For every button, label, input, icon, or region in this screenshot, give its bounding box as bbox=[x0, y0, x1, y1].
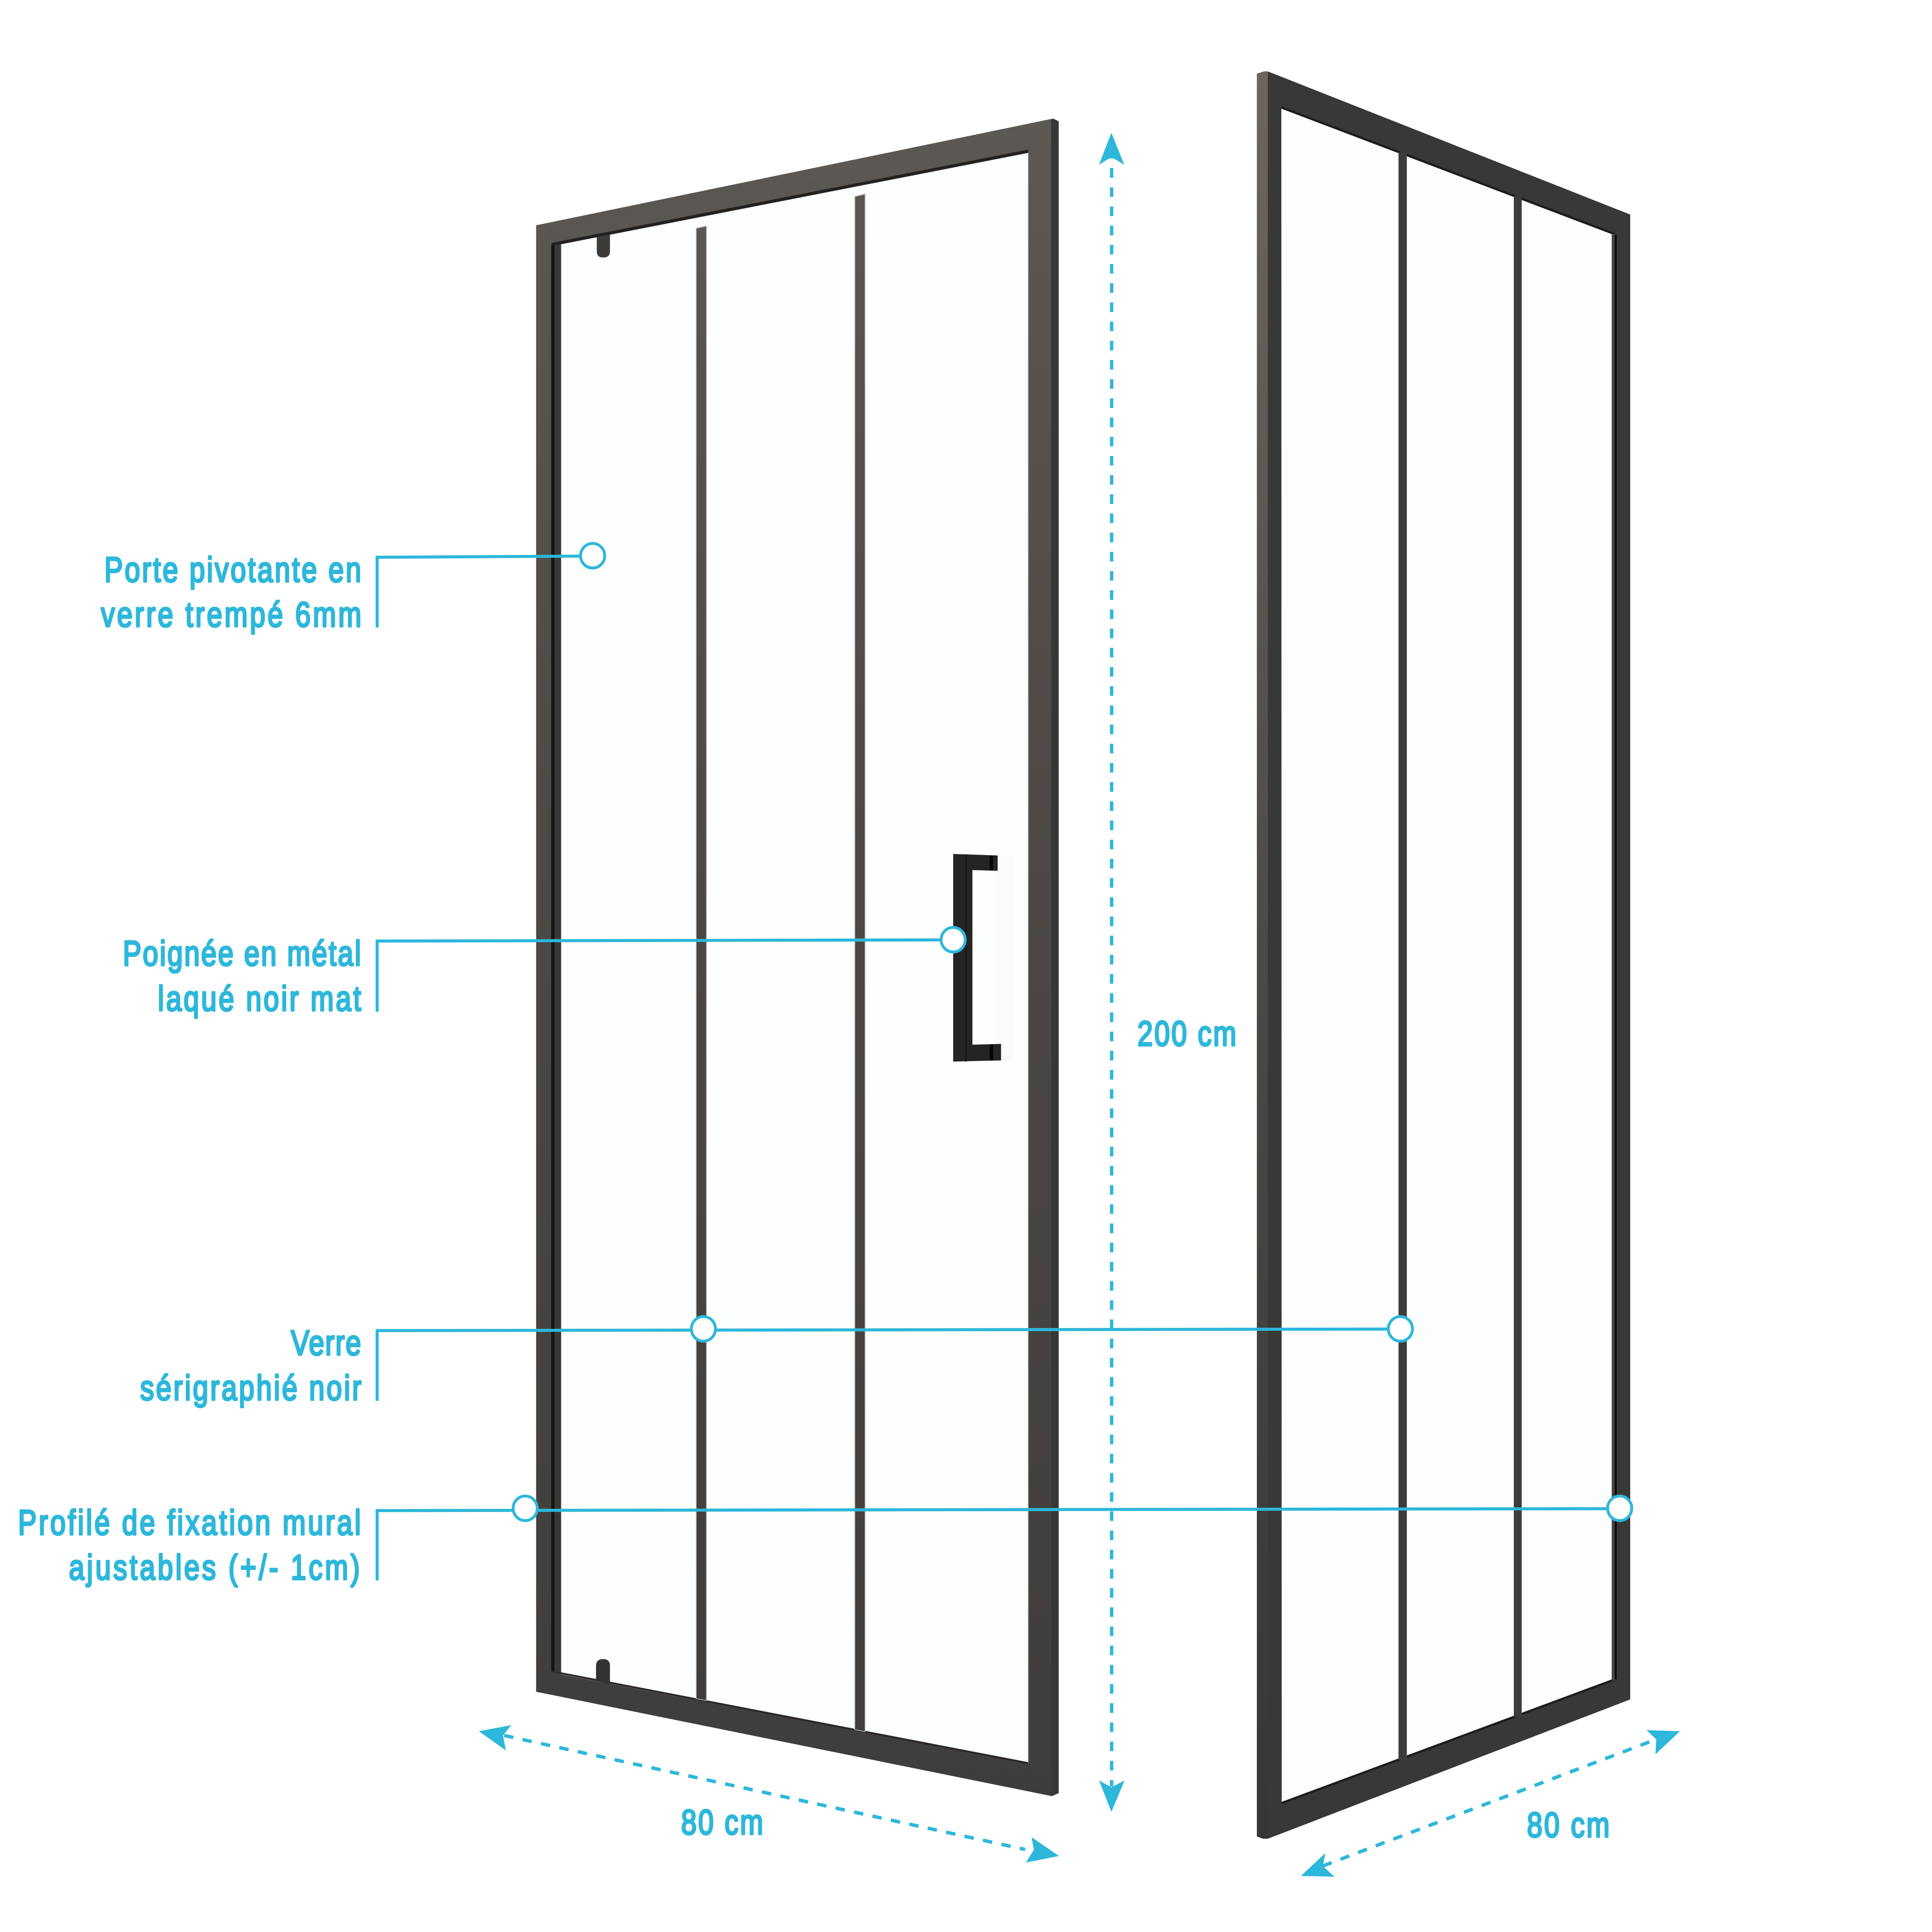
callout: metal handle: laqué noir mat bbox=[158, 980, 361, 1019]
glass panel bbox=[1281, 108, 1612, 1803]
callout: tempered glass door bbox=[101, 543, 605, 634]
handle shadow bbox=[995, 857, 1014, 1061]
frame left side face bbox=[1257, 71, 1268, 1839]
inner profile bbox=[551, 245, 554, 1671]
door handle bbox=[953, 854, 1001, 1061]
inner profile bbox=[1612, 234, 1615, 1680]
callout: wall fixing profile bbox=[18, 1496, 1632, 1587]
screen-printed stripe 2 bbox=[1514, 196, 1522, 1717]
callout: screen-printed glass bbox=[140, 1316, 1412, 1408]
panel: left pivoting door bbox=[536, 119, 1059, 1796]
callout: tempered glass door: Porte pivotante en bbox=[104, 550, 361, 589]
dimension label: right 80 cm: 80 cm bbox=[1527, 1806, 1610, 1845]
callout: screen-printed glass: Verre bbox=[291, 1323, 361, 1363]
panel: right fixed panel bbox=[1257, 71, 1630, 1839]
screen-printed stripe 1 bbox=[1398, 152, 1407, 1760]
dimension: height arrow bbox=[1099, 133, 1124, 1812]
inner frame shadow bbox=[1281, 107, 1615, 234]
glass panel bbox=[561, 153, 1028, 1763]
inner frame shadow bbox=[551, 151, 1028, 245]
dimension: right panel width arrow bbox=[1301, 1730, 1680, 1877]
bottom hinge bbox=[596, 1659, 610, 1684]
door frame bbox=[536, 119, 1059, 1796]
screen-printed stripe 2 bbox=[855, 194, 865, 1732]
callout: metal handle: Poignée en métal bbox=[123, 934, 361, 973]
callout: tempered glass door: verre trempé 6mm bbox=[101, 595, 361, 634]
dimension label: 200 cm: 200 cm bbox=[1138, 1014, 1236, 1053]
screen-printed stripe 1 bbox=[696, 226, 706, 1701]
callout: wall fixing profile: ajustables (+/- 1cm) bbox=[69, 1548, 360, 1587]
dimension: left door width arrow bbox=[479, 1725, 1059, 1862]
callout: screen-printed glass: sérigraphié noir bbox=[140, 1369, 361, 1408]
callout: metal handle bbox=[123, 927, 965, 1019]
frame right side face bbox=[1051, 119, 1059, 1796]
dimension label: left 80 cm: 80 cm bbox=[681, 1803, 763, 1842]
panel frame bbox=[1268, 71, 1630, 1839]
top hinge bbox=[597, 235, 610, 257]
callout: wall fixing profile: Profilé de fixation mural bbox=[18, 1503, 361, 1543]
